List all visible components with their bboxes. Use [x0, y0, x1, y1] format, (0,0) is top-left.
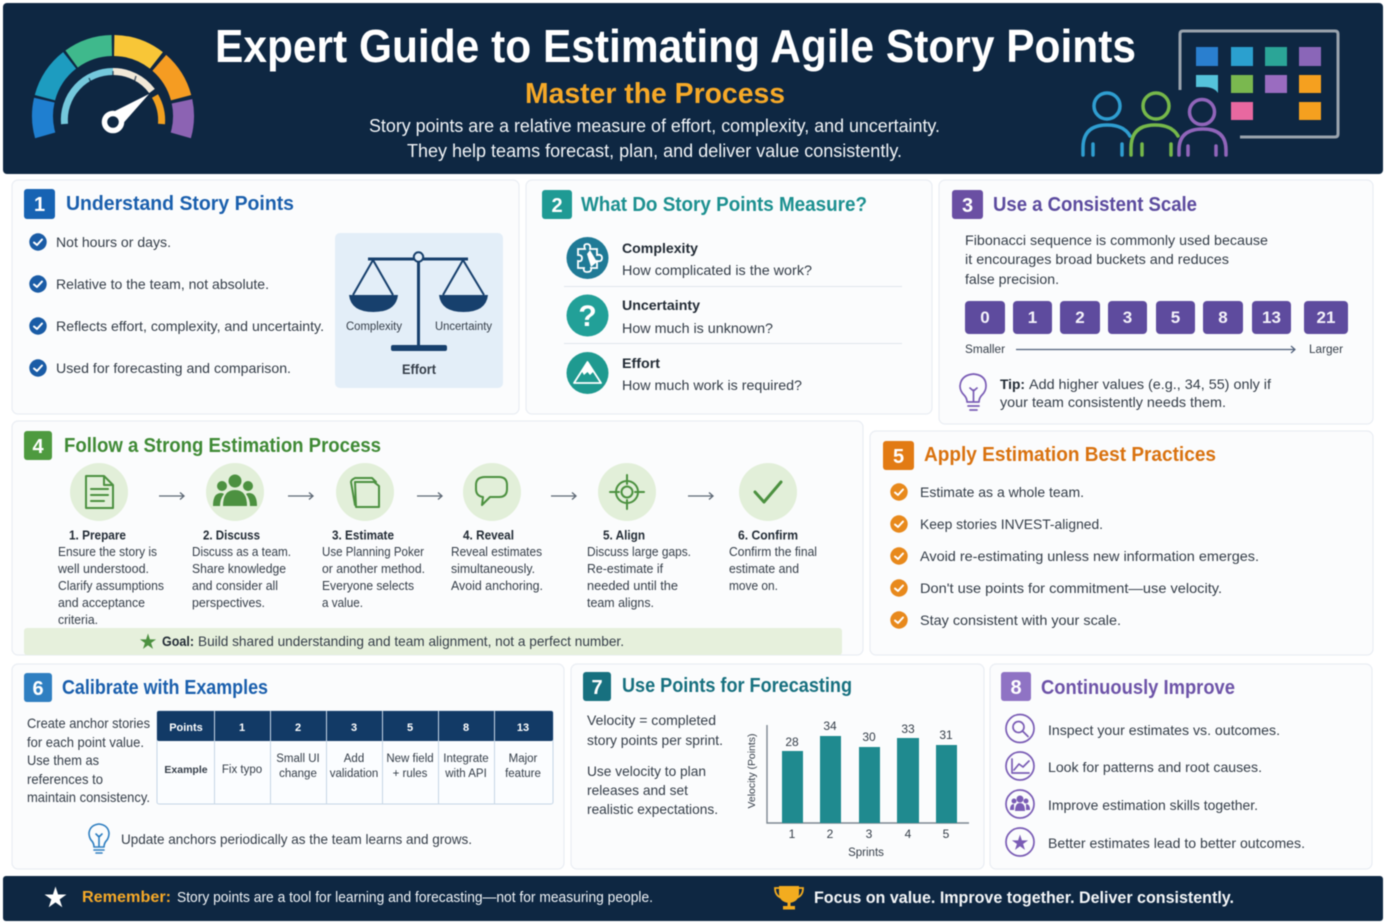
- practice list: Avoid re-estimating unless new information emerges.: [920, 548, 1259, 564]
- panel 3: consistent scale: [939, 180, 1373, 424]
- effort text: [622, 355, 802, 393]
- examples table: + rules: [393, 768, 428, 780]
- step 2: discuss: Share knowledge: [192, 562, 286, 576]
- heading 1: Understand Story Points: [66, 193, 294, 215]
- remember message: Remember:: [82, 889, 171, 906]
- patterns item: Look for patterns and root causes.: [1048, 759, 1262, 775]
- smaller to larger arrow: [965, 344, 1343, 356]
- scale description: Fibonacci sequence is commonly used because: [965, 232, 1268, 248]
- bar chart: velocity per sprint: Velocity (Points): [746, 734, 758, 808]
- step 6: confirm: estimate and: [729, 562, 799, 576]
- step 4: reveal: 4. Reveal: [463, 528, 514, 542]
- examples table: validation: [330, 768, 378, 780]
- step 1: prepare: 1. Prepare: [69, 528, 126, 542]
- heading 2: What Do Story Points Measure?: [581, 194, 867, 216]
- icon: trophy: [775, 886, 803, 910]
- checklist: Used for forecasting and comparison.: [56, 360, 291, 376]
- header banner: [3, 3, 1383, 174]
- checklist: Relative to the team, not absolute.: [56, 276, 269, 292]
- fibonacci scale tiles: 13: [1262, 308, 1281, 327]
- inspect item: [1006, 714, 1280, 742]
- fibonacci scale tiles: 3: [1123, 308, 1132, 327]
- anchor update note: Update anchors periodically as the team learns and grows.: [121, 831, 472, 847]
- anchor stories text: [27, 715, 150, 805]
- step 3: estimate: or another method.: [322, 562, 425, 576]
- bar chart: velocity per sprint: 1: [789, 827, 796, 841]
- examples table: [157, 711, 553, 804]
- bar chart: velocity per sprint: 3: [866, 827, 873, 841]
- scale description: [965, 232, 1268, 287]
- skills item: Improve estimation skills together.: [1048, 797, 1258, 813]
- panel 5: best practices: [870, 431, 1373, 655]
- icon: star: [45, 886, 66, 907]
- step 5: align: Re-estimate if: [587, 562, 664, 576]
- examples table: New field: [386, 753, 434, 765]
- step 6: confirm: 6. Confirm: [738, 528, 798, 542]
- arrow: [159, 492, 184, 500]
- badge 6: 6: [32, 678, 44, 700]
- bar chart: velocity per sprint: 34: [823, 719, 837, 733]
- arrow: [551, 492, 576, 500]
- anchor stories text: for each point value.: [27, 734, 144, 750]
- step 1: prepare: criteria.: [58, 613, 98, 627]
- bar chart: velocity per sprint: 5: [943, 827, 950, 841]
- bar chart: velocity per sprint: 33: [901, 722, 915, 736]
- examples table: Small UI: [276, 753, 320, 765]
- goal callout: Goal:: [162, 633, 194, 649]
- step 5: align: [587, 463, 691, 610]
- icon: lightbulb tip: [960, 374, 986, 410]
- bar chart: velocity per sprint: 30: [862, 730, 876, 744]
- skills item: [1006, 790, 1258, 818]
- icon: team at task board: [1083, 31, 1338, 155]
- goal callout: [24, 628, 842, 655]
- illustration: balance scale: Uncertainty: [435, 321, 492, 333]
- anchor stories text: Use them as: [27, 752, 99, 768]
- fibonacci scale tiles: 2: [1075, 308, 1085, 327]
- uncertainty text: How much is unknown?: [622, 320, 773, 336]
- intro text: Story points are a relative measure of effort, complexity, and uncertainty.: [369, 116, 940, 136]
- heading 6: Calibrate with Examples: [62, 677, 268, 699]
- checklist: [29, 233, 324, 377]
- examples table: Fix typo: [222, 764, 262, 776]
- examples table: 1: [239, 722, 245, 734]
- intro text: [369, 116, 940, 161]
- effort text: How much work is required?: [622, 377, 802, 393]
- icon: mountain: [566, 352, 608, 394]
- anchor stories text: maintain consistency.: [27, 789, 150, 805]
- fibonacci scale tiles: 8: [1218, 308, 1228, 327]
- heading 7: Use Points for Forecasting: [622, 675, 852, 697]
- step 3: estimate: [322, 463, 425, 610]
- panel 1: understand story points: [12, 180, 519, 414]
- badge 4: [24, 431, 52, 460]
- practice list: Stay consistent with your scale.: [920, 612, 1121, 628]
- badge 1: 1: [34, 194, 45, 216]
- step 2: discuss: 2. Discuss: [203, 528, 260, 542]
- badge 8: 8: [1010, 677, 1022, 699]
- step 4: reveal: Reveal estimates: [451, 545, 542, 559]
- panel 7: forecasting: [571, 664, 984, 869]
- step 3: estimate: Everyone selects: [322, 579, 414, 593]
- step 4: reveal: [451, 463, 543, 593]
- bar chart: velocity per sprint: 2: [827, 827, 834, 841]
- smaller to larger arrow: Larger: [1309, 344, 1343, 356]
- bar chart: velocity per sprint: Sprints: [848, 847, 884, 859]
- examples table: change: [279, 768, 317, 780]
- heading 8: Continuously Improve: [1041, 677, 1235, 699]
- badge 7: 7: [591, 677, 603, 699]
- complexity text: [622, 240, 812, 278]
- checklist: Not hours or days.: [56, 234, 171, 250]
- step 2: discuss: perspectives.: [192, 596, 265, 610]
- arrow: [417, 492, 442, 500]
- tip text: your team consistently needs them.: [1000, 394, 1226, 410]
- examples table: with API: [444, 768, 487, 780]
- step 5: align: 5. Align: [603, 528, 645, 542]
- step 6: confirm: [729, 463, 817, 593]
- title: Expert Guide to Estimating Agile Story Points: [215, 20, 1136, 72]
- step 2: discuss: Discuss as a team.: [192, 545, 291, 559]
- examples table: feature: [505, 768, 541, 780]
- velocity text: story points per sprint.: [587, 732, 723, 748]
- heading 3: Use a Consistent Scale: [993, 194, 1197, 216]
- examples table: 2: [295, 722, 301, 734]
- step 3: estimate: 3. Estimate: [332, 528, 394, 542]
- badge 5: 5: [893, 446, 904, 468]
- arrow: [688, 492, 713, 500]
- examples table: Add: [344, 753, 364, 765]
- badge 6: [24, 673, 52, 702]
- bar chart: velocity per sprint: 28: [785, 735, 799, 749]
- effort text: Effort: [622, 355, 660, 371]
- step 1: prepare: well understood.: [57, 562, 149, 576]
- examples table: 3: [351, 722, 357, 734]
- examples table: Integrate: [443, 753, 489, 765]
- badge 5: [883, 441, 914, 470]
- fibonacci scale tiles: 1: [1028, 308, 1037, 327]
- step 3: estimate: Use Planning Poker: [322, 545, 424, 559]
- remember message: Story points are a tool for learning and forecasting—not for measuring people.: [177, 890, 653, 906]
- step 6: confirm: Confirm the final: [729, 545, 817, 559]
- heading 4: Follow a Strong Estimation Process: [64, 435, 381, 457]
- step 2: discuss: and consider all: [192, 579, 278, 593]
- anchor stories text: Create anchor stories: [27, 715, 150, 731]
- illustration: balance scale: Complexity: [346, 321, 402, 333]
- tip text: Add higher values (e.g., 34, 55) only if: [1029, 376, 1271, 392]
- badge 1: [24, 189, 55, 219]
- step 5: align: needed until the: [587, 579, 678, 593]
- practice list: Keep stories INVEST-aligned.: [920, 516, 1103, 532]
- tip text: Tip:: [1000, 376, 1025, 392]
- velocity text: [587, 712, 723, 817]
- fibonacci scale tiles: [965, 301, 1348, 334]
- badge 8: [1001, 672, 1031, 701]
- step 6: confirm: move on.: [729, 579, 778, 593]
- examples table: Major: [509, 753, 538, 765]
- intro text: They help teams forecast, plan, and deliver value consistently.: [407, 141, 902, 161]
- uncertainty text: Uncertainty: [622, 297, 700, 313]
- panel 6: calibrate with examples: [12, 664, 564, 869]
- panel 4: estimation process: [12, 421, 863, 655]
- badge 2: 2: [551, 195, 563, 217]
- outcomes item: [1006, 828, 1305, 856]
- heading 5: Apply Estimation Best Practices: [924, 444, 1216, 466]
- velocity text: Use velocity to plan: [587, 763, 706, 779]
- badge 7: [583, 672, 611, 701]
- practice list: Don't use points for commitment—use velocity.: [920, 580, 1222, 596]
- step 3: estimate: a value.: [322, 596, 363, 610]
- arrow: [288, 492, 313, 500]
- tip text: [1000, 376, 1271, 410]
- examples table: 5: [407, 722, 413, 734]
- inspect item: Inspect your estimates vs. outcomes.: [1048, 722, 1280, 738]
- velocity text: releases and set: [587, 782, 688, 798]
- scale description: it encourages broad buckets and reduces: [965, 251, 1229, 267]
- step 4: reveal: simultaneously.: [451, 562, 535, 576]
- subtitle: Master the Process: [525, 78, 785, 110]
- footer banner: [3, 876, 1383, 921]
- icon: lightbulb: [89, 824, 109, 853]
- fibonacci scale tiles: 21: [1317, 308, 1335, 327]
- badge 2: [542, 190, 572, 219]
- badge 3: 3: [962, 195, 973, 217]
- step 2: discuss: [192, 463, 291, 610]
- complexity text: How complicated is the work?: [622, 262, 812, 278]
- step 1: prepare: [57, 463, 164, 627]
- uncertainty text: [622, 297, 773, 336]
- smaller to larger arrow: Smaller: [965, 344, 1005, 356]
- illustration: balance scale: [335, 233, 503, 388]
- icon: question mark: ?: [578, 300, 597, 333]
- step 1: prepare: Clarify assumptions: [58, 579, 164, 593]
- badge 4: 4: [32, 436, 44, 458]
- examples table: Example: [164, 764, 208, 776]
- anchor stories text: references to: [27, 771, 103, 787]
- icon: puzzle piece: [566, 237, 608, 279]
- closing message: Focus on value. Improve together. Deliver consistently.: [814, 889, 1234, 907]
- velocity text: realistic expectations.: [587, 801, 718, 817]
- panel 8: continuously improve: [990, 664, 1372, 869]
- illustration: balance scale: Effort: [402, 362, 436, 377]
- bar chart: velocity per sprint: [746, 719, 969, 859]
- fibonacci scale tiles: 5: [1171, 308, 1180, 327]
- outcomes item: Better estimates lead to better outcomes.: [1048, 835, 1305, 851]
- step 1: prepare: Ensure the story is: [58, 545, 157, 559]
- step 4: reveal: Avoid anchoring.: [451, 579, 543, 593]
- velocity text: Velocity = completed: [587, 712, 716, 728]
- examples table: Points: [169, 722, 203, 734]
- goal callout: Build shared understanding and team alignment, not a perfect number.: [198, 633, 624, 649]
- practice list: [890, 483, 1259, 629]
- badge 3: [952, 190, 983, 219]
- fibonacci scale tiles: 0: [980, 308, 990, 327]
- bar chart: velocity per sprint: 31: [939, 728, 953, 742]
- panel 2: what story points measure: [526, 180, 932, 414]
- patterns item: [1006, 752, 1262, 780]
- icon: question mark: [566, 294, 608, 336]
- step 5: align: team aligns.: [587, 596, 654, 610]
- checklist: Reflects effort, complexity, and uncertainty.: [56, 318, 324, 334]
- practice list: Estimate as a whole team.: [920, 484, 1084, 500]
- examples table: 8: [463, 722, 469, 734]
- examples table: 13: [517, 722, 529, 734]
- scale description: false precision.: [965, 271, 1059, 287]
- step 5: align: Discuss large gaps.: [587, 545, 691, 559]
- complexity text: Complexity: [622, 240, 698, 256]
- icon: speedometer gauge: [42, 46, 184, 135]
- step 1: prepare: and acceptance: [58, 596, 145, 610]
- bar chart: velocity per sprint: 4: [905, 827, 912, 841]
